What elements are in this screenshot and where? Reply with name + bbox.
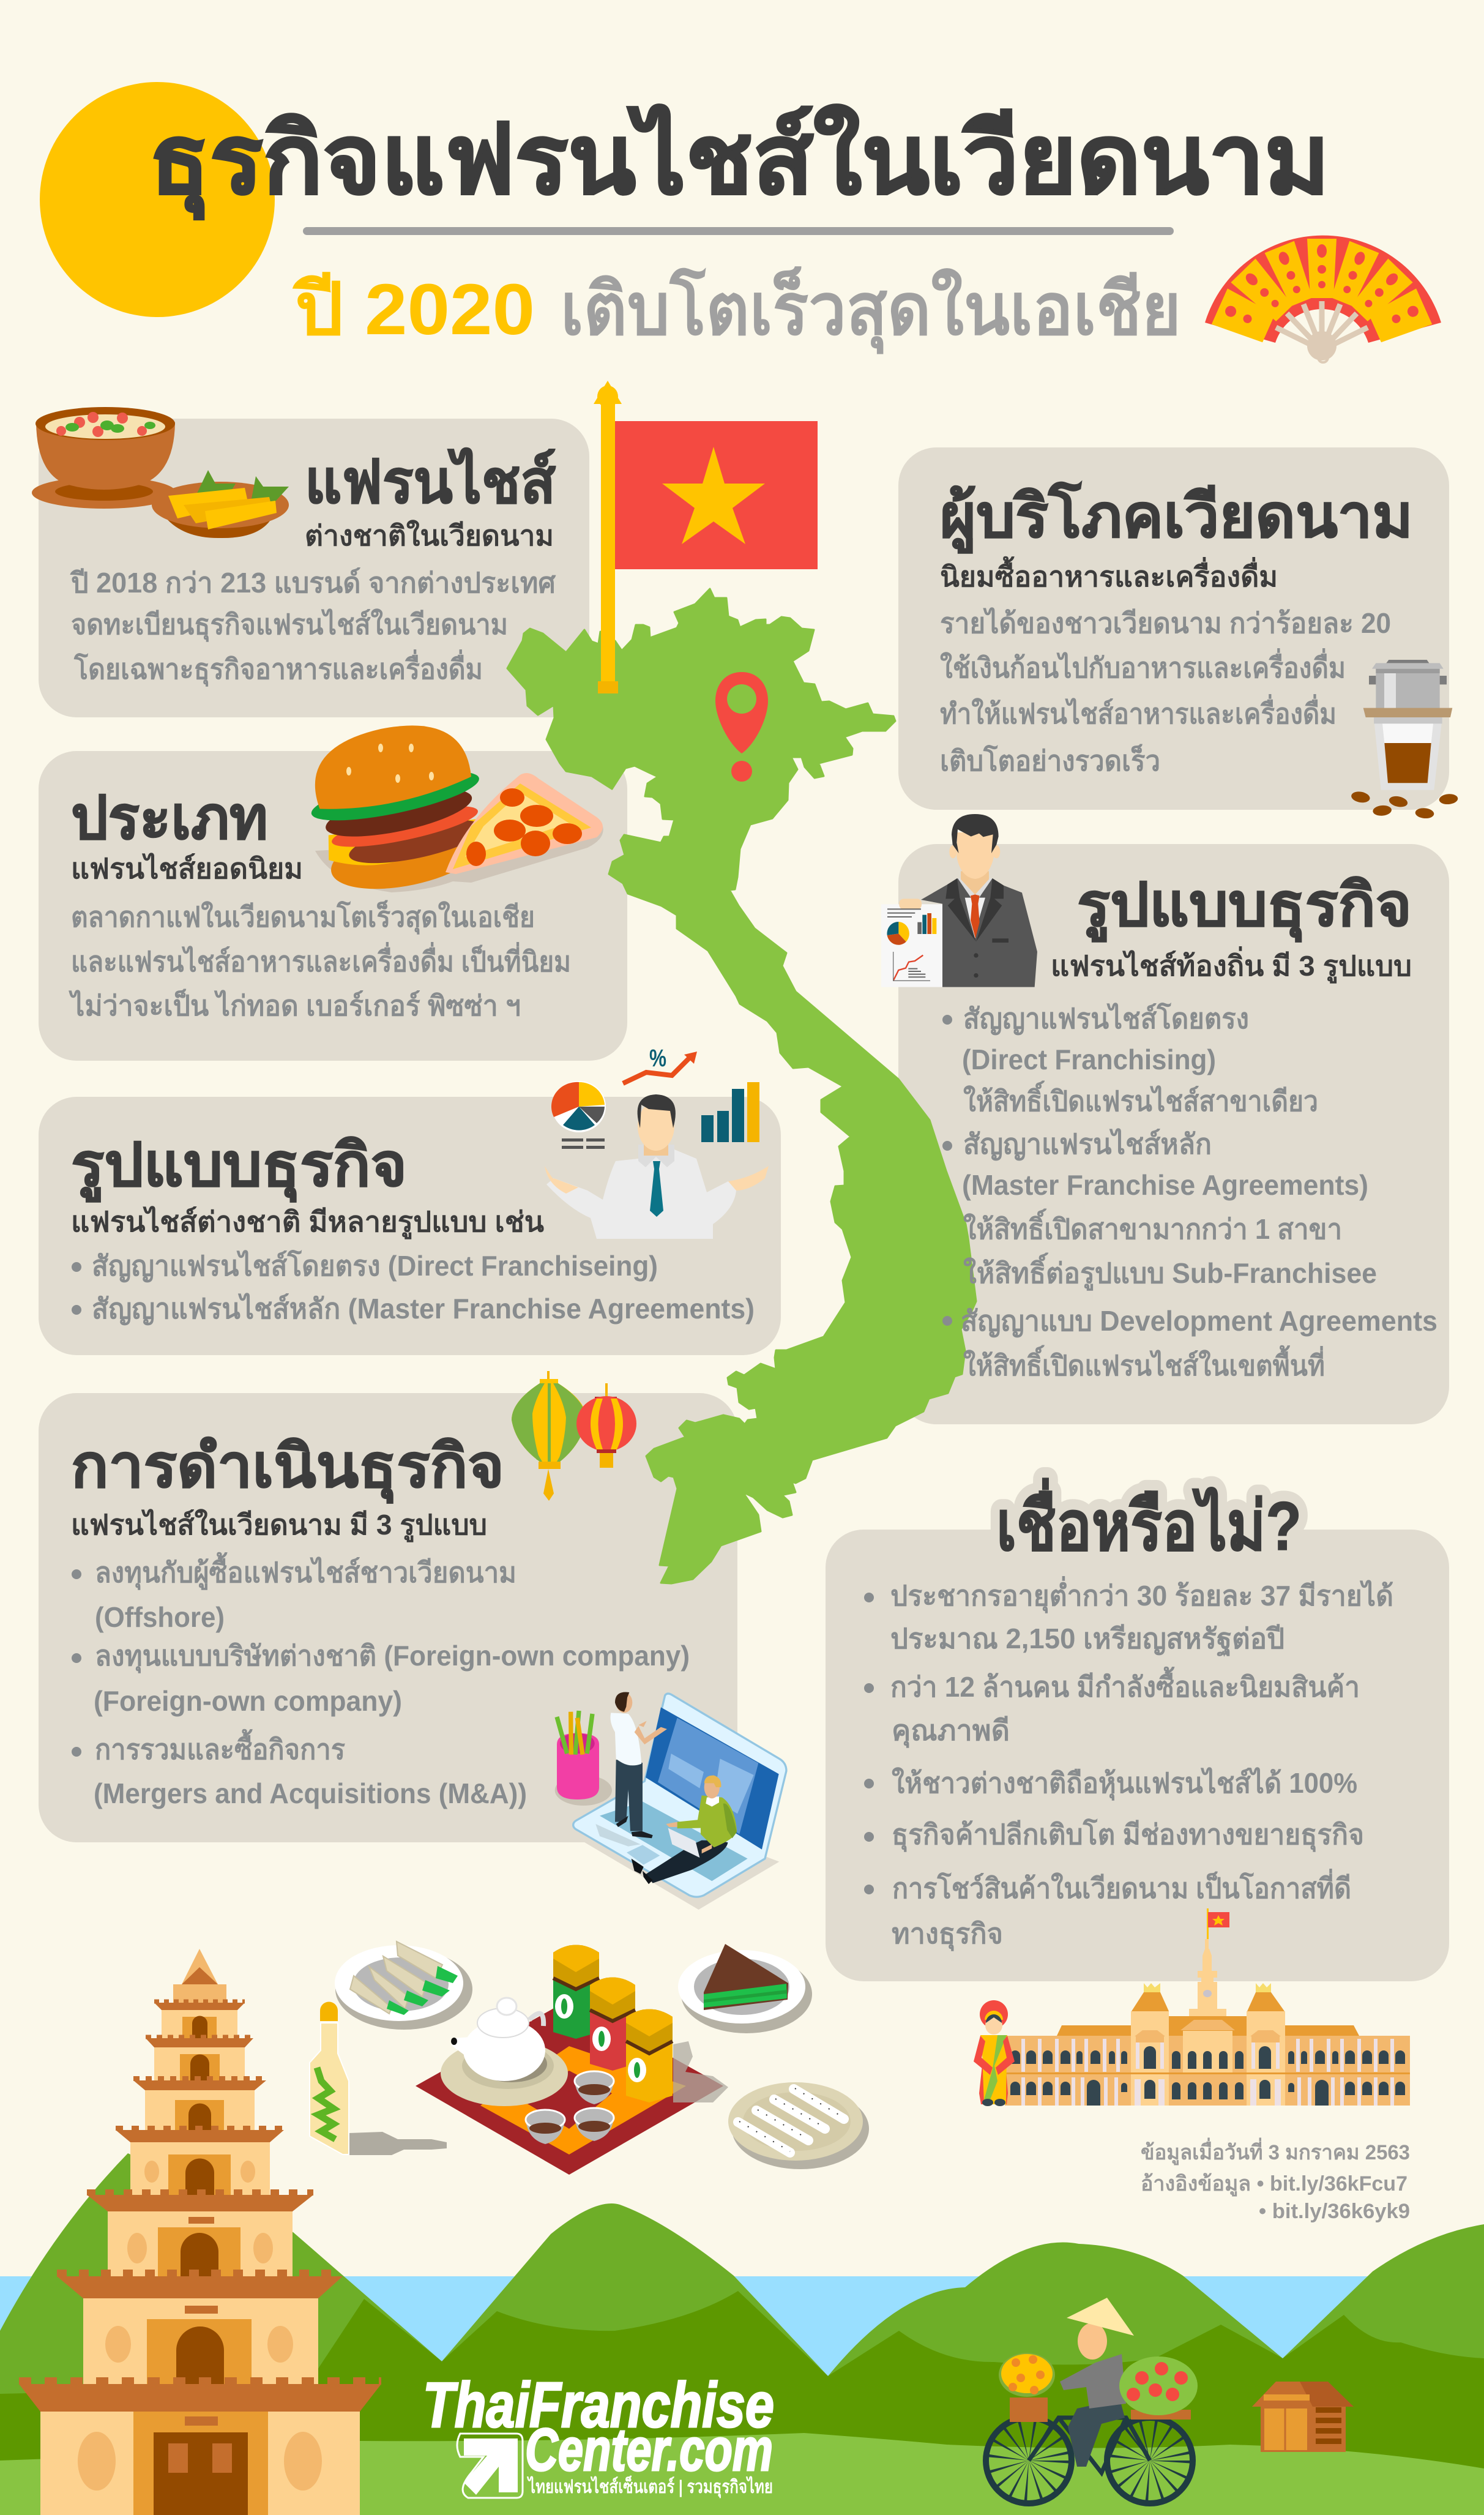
text: sources — [1141, 2137, 1410, 2223]
text: local business models bullets: สัญญาแบบ Development Agreements — [961, 1305, 1437, 1337]
panel: business models foreign — [39, 1097, 781, 1355]
text: believe it or not bullets: คุณภาพดี — [892, 1714, 1010, 1748]
text: business models foreign bullets: สัญญาแฟรนไชส์หลัก (Master Franchise Agreements) — [92, 1293, 755, 1325]
icon: lanterns — [512, 1371, 636, 1501]
text: believe it or not bullets: ธุรกิจค้าปลีกเติบโต มีช่องทางขยายธุรกิจ — [892, 1818, 1364, 1852]
icon: small wooden house — [1252, 2382, 1354, 2452]
heading: foreign franchises: ต่างชาติในเวียดนาม — [305, 519, 554, 551]
text: consumers body: เติบโตอย่างรวดเร็ว — [940, 744, 1160, 777]
icon: pagoda — [19, 1949, 381, 2515]
text: operations bullets: (Offshore) — [95, 1601, 225, 1633]
heading: consumers: ผู้บริโภคเวียดนาม — [940, 482, 1413, 554]
text: local business models bullets: (Master Franchise Agreements) — [962, 1169, 1368, 1201]
heading: franchise types — [71, 784, 303, 884]
heading: franchise types: แฟรนไชส์ยอดนิยม — [71, 853, 303, 884]
text: consumers body — [940, 607, 1391, 777]
icon: spring roll bowl — [152, 470, 289, 538]
text: local business models bullets: สัญญาแฟรนไชส์หลัก — [963, 1128, 1212, 1160]
text: operations bullets: ลงทุนแบบบริษัทต่างชาติ (Foreign-own company) — [95, 1640, 690, 1673]
heading: local business models: รูปแบบธุรกิจ — [1077, 871, 1412, 943]
text: believe it or not bullets: การโชว์สินค้าในเวียดนาม เป็นโอกาสที่ดี — [892, 1869, 1351, 1904]
heading: consumers: นิยมซื้ออาหารและเครื่องดื่ม — [940, 556, 1278, 592]
icon: woman on bicycle — [986, 2298, 1198, 2503]
logo: ThaiFranchise Center: ThaiFranchise — [423, 2370, 774, 2441]
heading: local business models — [1051, 871, 1412, 984]
text: operations bullets: (Foreign-own company) — [94, 1685, 402, 1717]
panel: operations — [39, 1393, 737, 1842]
text: franchise types body: และแฟรนไชส์อาหารและเครื่องดื่ม เป็นที่นิยม — [71, 942, 571, 977]
text: local business models bullets: สัญญาแฟรนไชส์โดยตรง — [963, 1002, 1249, 1035]
icon: vietnamese drip coffee — [1351, 660, 1458, 819]
logo: ThaiFranchise Center — [423, 2370, 774, 2498]
heading: local business models: แฟรนไชส์ท้องถิ่น มี 3 รูปแบบ — [1051, 946, 1412, 984]
icon: tea set on red mat — [416, 1945, 728, 2175]
text: sources: อ้างอิงข้อมูล • bit.ly/36kFcu7 — [1141, 2172, 1408, 2197]
icon: businessman with report — [881, 814, 1037, 987]
text: foreign franchises body: ปี 2018 กว่า 213 แบรนด์ จากต่างประเทศ — [70, 567, 556, 599]
heading: business models foreign — [71, 1131, 545, 1239]
icon: businessman with charts — [545, 1045, 769, 1239]
text: sources: ข้อมูลเมื่อวันที่ 3 มกราคม 2563 — [1141, 2137, 1410, 2166]
text: operations bullets: ลงทุนกับผู้ซื้อแฟรนไชส์ชาวเวียดนาม — [95, 1552, 516, 1590]
logo: ThaiFranchise Center: ไทยแฟรนไชส์เซ็นเตอร์ | รวมธุรกิจไทย — [527, 2475, 773, 2498]
text: local business models bullets: ให้สิทธิ์เปิดสาขามากกว่า 1 สาขา — [963, 1208, 1342, 1245]
icon: laptop with people — [555, 1692, 786, 1910]
text: business models foreign bullets — [72, 1249, 755, 1325]
title divider — [303, 227, 1174, 235]
subtitle — [292, 266, 1181, 354]
text: local business models bullets: ให้สิทธิ์ต่อรูปแบบ Sub-Franchisee — [963, 1252, 1377, 1291]
text: believe it or not bullets: กว่า 12 ล้านคน มีกำลังซื้อและนิยมสินค้า — [890, 1666, 1360, 1703]
icon: saigon city hall — [1005, 1908, 1410, 2106]
text: believe it or not bullets: ทางธุรกิจ — [892, 1918, 1003, 1951]
heading: operations — [71, 1432, 504, 1542]
panel: local business models — [898, 844, 1449, 1424]
heading: business models foreign: รูปแบบธุรกิจ — [71, 1131, 407, 1203]
map pin — [715, 672, 768, 782]
text: business models foreign bullets: สัญญาแฟรนไชส์โดยตรง (Direct Franchiseing) — [92, 1249, 658, 1282]
panel: franchise types — [39, 751, 627, 1061]
panel: foreign franchises — [39, 419, 589, 717]
text: local business models bullets: (Direct Franchising) — [962, 1044, 1216, 1075]
text: foreign franchises body: จดทะเบียนธุรกิจแฟรนไชส์ในเวียดนาม — [71, 608, 508, 642]
heading: consumers — [940, 482, 1413, 592]
heading: operations: การดำเนินธุรกิจ — [71, 1432, 504, 1504]
icon: woman in ao dai — [974, 2000, 1015, 2106]
icon: rice rolls on plate — [728, 2082, 869, 2169]
text: believe it or not bullets — [864, 1576, 1393, 1951]
icon: soup bowl — [32, 407, 176, 509]
subtitle: ปี 2020 — [292, 269, 535, 350]
logo: ThaiFranchise Center: Center.com — [525, 2416, 773, 2483]
icon: cake on plate — [678, 1944, 812, 2033]
text: local business models bullets — [942, 1002, 1437, 1381]
text: franchise types body: ไม่ว่าจะเป็น ไก่ทอด เบอร์เกอร์ พิซซ่า ฯ — [68, 988, 521, 1022]
text: operations bullets — [72, 1552, 690, 1809]
text: believe it or not bullets: ประชากรอายุต่ำกว่า 30 ร้อยละ 37 มีรายได้ — [890, 1576, 1393, 1613]
flag of Vietnam — [594, 381, 818, 693]
icon: businessman with charts: % — [649, 1045, 666, 1072]
text: foreign franchises body — [70, 567, 556, 687]
heading: franchise types: ประเภท — [71, 784, 268, 851]
text: local business models bullets: ให้สิทธิ์เปิดแฟรนไชส์สาขาเดียว — [963, 1080, 1318, 1117]
heading: operations: แฟรนไชส์ในเวียดนาม มี 3 รูปแบบ — [71, 1508, 487, 1542]
text: consumers body: ใช้เงินก้อนไปกับอาหารและเครื่องดื่ม — [940, 648, 1346, 684]
heading: foreign franchises — [305, 447, 556, 551]
subtitle: เติบโตเร็วสุดในเอเชีย — [561, 266, 1181, 354]
text: operations bullets: (Mergers and Acquisitions (M&A)) — [94, 1777, 527, 1809]
heading: foreign franchises: แฟรนไชส์ — [305, 447, 556, 515]
icon: bottle with shadow — [310, 2001, 447, 2155]
text: consumers body: ทำให้แฟรนไชส์อาหารและเครื่องดื่ม — [940, 694, 1337, 730]
text: consumers body: รายได้ของชาวเวียดนาม กว่าร้อยละ 20 — [940, 607, 1391, 639]
panel: vietnamese consumers — [898, 447, 1449, 810]
panel: believe it or not — [826, 1530, 1449, 1981]
heading: believe it or not: เชื่อหรือไม่? — [996, 1478, 1302, 1564]
heading: business models foreign: แฟรนไชส์ต่างชาติ มีหลายรูปแบบ เช่น — [71, 1206, 545, 1239]
text: local business models bullets: ให้สิทธิ์เปิดแฟรนไชส์ในเขตพื้นที่ — [963, 1345, 1325, 1381]
text: franchise types body: ตลาดกาแฟในเวียดนามโตเร็วสุดในเอเชีย — [71, 900, 535, 935]
text: sources: • bit.ly/36k6yk9 — [1259, 2200, 1410, 2223]
landscape background — [0, 2153, 1484, 2515]
map of Vietnam — [507, 589, 976, 1583]
icon: burger and pizza — [297, 711, 603, 902]
sun circle — [40, 82, 275, 317]
heading: believe it or not: เชื่อหรือไม่? — [996, 1478, 1302, 1564]
text: operations bullets: การรวมและซื้อกิจการ — [95, 1728, 345, 1765]
text: foreign franchises body: โดยเฉพาะธุรกิจอาหารและเครื่องดื่ม — [73, 649, 483, 687]
text: believe it or not bullets: ประมาณ 2,150 เหรียญสหรัฐต่อปี — [890, 1623, 1285, 1657]
text: believe it or not bullets: ให้ชาวต่างชาติถือหุ้นแฟรนไชส์ได้ 100% — [892, 1766, 1357, 1801]
icon: red fan — [1205, 236, 1441, 362]
text: franchise types body — [68, 900, 571, 1022]
title: ธุรกิจแฟรนไชส์ในเวียดนาม — [149, 104, 1330, 220]
icon: food plate with rolls — [335, 1941, 472, 2030]
